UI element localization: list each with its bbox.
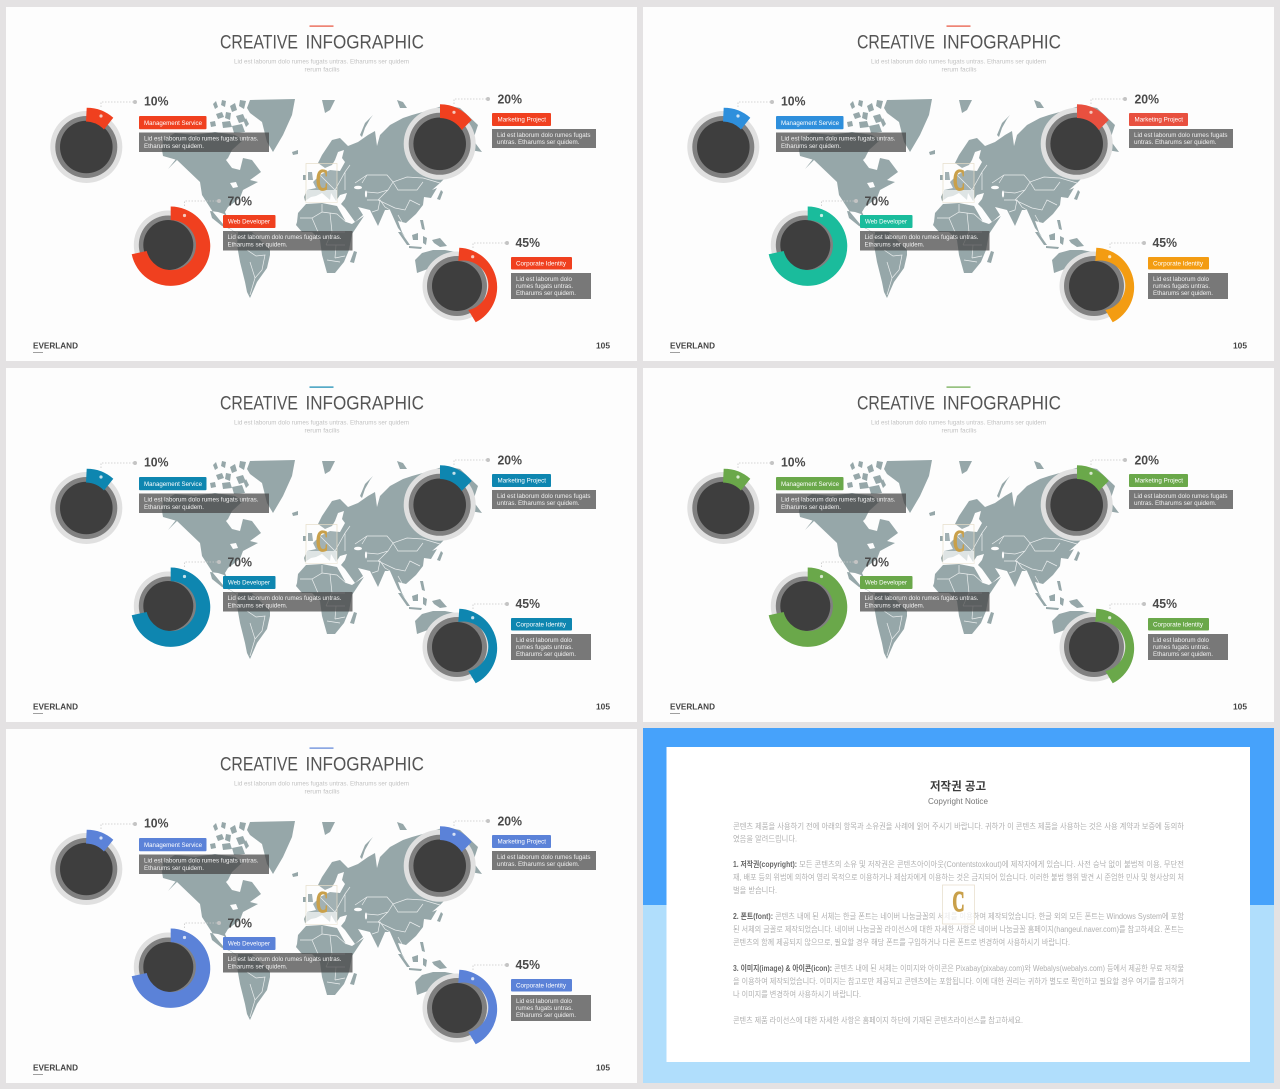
- notice subheading: Copyright Notice: [928, 797, 989, 806]
- label: Corporate Identity: Corporate Identity: [516, 621, 567, 628]
- title: CREATIVE: [220, 392, 298, 414]
- text box: Lid est laborum dolo rumes fugats untras.: [781, 496, 896, 504]
- watermark logo: [943, 162, 974, 202]
- subtitle: rerum facilis: [942, 428, 977, 434]
- text box: [139, 132, 269, 152]
- text box: Lid est laborum dolo rumes fugats: [497, 854, 590, 861]
- watermark logo: [306, 523, 337, 564]
- leader: 70%: [184, 560, 221, 567]
- value: 20%: 20%: [498, 92, 522, 106]
- page number: 105: [596, 340, 610, 350]
- label: Marketing Project: Marketing Project: [498, 478, 546, 485]
- donut: 10%: [50, 469, 122, 544]
- leader: 20%: [454, 97, 490, 104]
- value: 70%: 70%: [228, 916, 252, 930]
- notice section 1: 모든 콘텐츠의 소유 및 저작권은 콘텐츠아이아웃(Contentstoxkout)에 제작자에게 있습니다. 사전 승낙 없이 불법적 이용, 무단전: [799, 859, 1184, 869]
- title: INFOGRAPHIC: [942, 32, 1061, 54]
- subtitle: rerum facilis: [304, 788, 340, 796]
- title accent: [310, 26, 334, 27]
- leader: 45%: [473, 963, 509, 970]
- panel: periwinkle infographic slide: [6, 729, 637, 1083]
- donut: 45%: [422, 970, 497, 1044]
- text box: untras. Etharums ser quidem.: [497, 500, 580, 507]
- donut: 20%: [404, 465, 476, 541]
- value: 45%: 45%: [516, 958, 540, 972]
- subtitle: [871, 58, 1046, 74]
- leader: 20%: [454, 819, 490, 826]
- page number: 105: [596, 1062, 610, 1072]
- label: Corporate Identity: Corporate Identity: [516, 982, 567, 989]
- text box: [860, 231, 990, 250]
- text box: Lid est laborum dolo rumes fugats untras.: [864, 234, 979, 241]
- text box: untras. Etharums ser quidem.: [497, 139, 580, 146]
- donut: 10%: [50, 830, 122, 905]
- text box: [1129, 490, 1233, 509]
- leader: 70%: [822, 560, 858, 567]
- donut: 45%: [1060, 609, 1134, 683]
- label: Management Service: Management Service: [144, 120, 202, 127]
- footer brand: EVERLAND: [33, 340, 78, 350]
- notice section 1: 벌을 받습니다.: [733, 885, 777, 895]
- text box: Lid est laborum dolo rumes fugats untras.: [144, 136, 259, 142]
- donut: 20%: [404, 104, 476, 180]
- text box: Lid est laborum dolo rumes fugats untras.: [228, 234, 342, 241]
- footer brand: EVERLAND: [670, 340, 715, 350]
- text box: rumes fugats untras.: [516, 1005, 573, 1012]
- label: Marketing Project: [1129, 474, 1188, 487]
- world map: [162, 460, 490, 661]
- text box: [511, 273, 591, 299]
- title: CREATIVE: [220, 754, 298, 776]
- notice section 3: 콘텐츠 내에 된 서체는 이미지와 아이콘은 Pixabay(pixabay.com)와 Webalys(webalys.com) 등에서 제공한 무료 저작물: [834, 963, 1184, 973]
- panel: multicolour infographic slide: [643, 7, 1274, 361]
- notice section 3: 을 이용하여 제작되었습니다. 이미지는 참고로만 제공되고 콘텐츠에는 포함됩니다. 이에 대한 권리는 귀하가 별도로 확인하고 필요할 경우 여기를 참고하거: [733, 976, 1184, 986]
- value: 70%: 70%: [228, 194, 252, 208]
- subtitle: rerum facilis: [304, 428, 340, 434]
- leader: 10%: [101, 822, 137, 829]
- world map: [799, 460, 1127, 661]
- label: Marketing Project: [492, 474, 551, 487]
- text box: untras. Etharums ser quidem.: [1134, 500, 1217, 507]
- leader: 20%: [1091, 458, 1127, 465]
- label: Marketing Project: Marketing Project: [498, 117, 546, 124]
- value: 10%: 10%: [781, 94, 806, 108]
- label: Marketing Project: Marketing Project: [1134, 478, 1183, 485]
- notice section 2: 콘텐츠 내에 된 서체는 한글 폰트는 네이버 나눔글꼴의 서체를 이용하여 제작되었습니다. 한글 외의 모든 폰트는 Windows System에 포함: [775, 911, 1185, 921]
- label: Corporate Identity: Corporate Identity: [1153, 260, 1204, 267]
- panel: red infographic slide: [6, 7, 637, 361]
- value: 45%: 45%: [1152, 236, 1177, 250]
- label: Marketing Project: Marketing Project: [498, 839, 546, 846]
- title accent: [310, 386, 334, 388]
- notice section 2: [733, 911, 1185, 947]
- text box: [1148, 634, 1228, 660]
- label: Corporate Identity: [1148, 618, 1209, 630]
- text box: [139, 494, 269, 513]
- leader: 70%: [822, 199, 858, 206]
- panel: teal-blue infographic slide: [6, 368, 637, 722]
- text box: Lid est laborum dolo rumes fugats untras.: [864, 595, 979, 602]
- subtitle: Lid est laborum dolo rumes fugats untras. Etharums ser quidem: [871, 420, 1046, 426]
- donut: 20%: [1041, 104, 1113, 180]
- leader: 70%: [184, 921, 221, 928]
- text box: Lid est laborum dolo rumes fugats untras.: [144, 496, 259, 504]
- donut: 45%: [422, 609, 497, 683]
- world map: [799, 99, 1127, 300]
- label: Marketing Project: [492, 113, 551, 126]
- watermark logo: C: [953, 523, 965, 558]
- notice section 1: [733, 859, 1184, 895]
- text box: [223, 953, 352, 972]
- text box: [492, 129, 596, 148]
- text box: untras. Etharums ser quidem.: [1134, 139, 1217, 146]
- label: Management Service: [776, 116, 844, 129]
- leader: 20%: [1091, 97, 1127, 104]
- text box: Etharums ser quidem.: [144, 143, 204, 150]
- notice heading: 저작권 공고: [930, 779, 986, 793]
- donut: 70%: [769, 568, 847, 647]
- text box: Etharums ser quidem.: [144, 504, 204, 511]
- value: 70%: 70%: [228, 555, 252, 569]
- label: Web Developer: Web Developer: [228, 219, 271, 226]
- notice section 1: 1. 저작권(copyright):: [733, 859, 797, 869]
- leader: 10%: [738, 100, 774, 107]
- page number: 105: [1233, 340, 1247, 350]
- label: Corporate Identity: [1148, 257, 1209, 270]
- donut: 10%: [687, 108, 759, 183]
- label: Web Developer: [223, 937, 276, 950]
- leader: 10%: [101, 100, 137, 107]
- label: Management Service: Management Service: [781, 120, 839, 127]
- title accent: [310, 748, 334, 749]
- leader: 10%: [738, 461, 774, 468]
- donut: 70%: [132, 928, 210, 1008]
- label: Management Service: [139, 477, 206, 490]
- text box: Lid est laborum dolo: [1153, 276, 1209, 283]
- label: Web Developer: [860, 576, 912, 589]
- footer brand: EVERLAND: [33, 702, 78, 712]
- label: Web Developer: [860, 215, 912, 228]
- text box: Etharums ser quidem.: [864, 603, 925, 610]
- donut: 45%: [1060, 248, 1134, 322]
- label: Management Service: [776, 477, 844, 490]
- leader: 45%: [473, 602, 509, 609]
- notice section 2: 된 서체의 글꼴로 제작되었습니다. 네이버 나눔글꼴 라이선스에 대한 자세한 사항은 네이버 나눔글꼴 홈페이지(hangeul.naver.com)를 참고하세요. 폰트는: [733, 924, 1184, 934]
- text box: Etharums ser quidem.: [1153, 651, 1213, 658]
- text box: Lid est laborum dolo rumes fugats: [497, 493, 590, 500]
- title: CREATIVE: [857, 392, 935, 414]
- value: 10%: 10%: [144, 455, 168, 469]
- value: 20%: 20%: [498, 453, 522, 467]
- notice section 2: 콘텐츠의 함께 제공되지 않으므로, 필요할 경우 해당 폰트를 구입하거나 다른 폰트로 변경하여 사용하시기 바랍니다.: [733, 937, 1070, 947]
- label: Corporate Identity: Corporate Identity: [1153, 621, 1204, 628]
- text box: Lid est laborum dolo rumes fugats untras.: [781, 136, 896, 142]
- title: CREATIVE: [857, 32, 935, 54]
- label: Corporate Identity: Corporate Identity: [516, 260, 567, 267]
- subtitle: Lid est laborum dolo rumes fugats untras. Etharums ser quidem: [234, 780, 409, 788]
- text box: [511, 634, 591, 660]
- subtitle: Lid est laborum dolo rumes fugats untras. Etharums ser quidem: [234, 420, 409, 426]
- donut: 20%: [404, 826, 476, 902]
- text box: [1129, 129, 1233, 148]
- text box: [511, 995, 591, 1021]
- text box: rumes fugats untras.: [516, 644, 573, 651]
- value: 70%: 70%: [864, 555, 889, 569]
- subtitle: Lid est laborum dolo rumes fugats untras. Etharums ser quidem: [234, 58, 409, 66]
- subtitle: [234, 420, 409, 434]
- watermark logo: [942, 885, 974, 924]
- label: Corporate Identity: [511, 618, 572, 630]
- leader: 45%: [1110, 241, 1146, 248]
- leader: 45%: [473, 241, 509, 248]
- text box: rumes fugats untras.: [516, 283, 573, 290]
- label: Web Developer: [223, 215, 276, 228]
- watermark logo: C: [953, 162, 965, 197]
- notice closing: 콘텐츠 제품 라이선스에 대한 자세한 사항은 홈페이지 하단에 기재된 콘텐츠라이선스를 참고하세요.: [733, 1015, 1023, 1025]
- title: CREATIVE: [220, 32, 298, 54]
- value: 20%: 20%: [1134, 92, 1159, 106]
- label: Web Developer: Web Developer: [228, 580, 271, 587]
- watermark logo: C: [952, 886, 964, 918]
- value: 45%: 45%: [516, 597, 540, 611]
- donut: 70%: [132, 206, 210, 286]
- value: 45%: 45%: [1152, 597, 1177, 611]
- donut: 70%: [769, 206, 847, 286]
- value: 10%: 10%: [781, 455, 806, 469]
- label: Management Service: Management Service: [144, 842, 202, 849]
- text box: Lid est laborum dolo: [516, 637, 572, 644]
- text box: Etharums ser quidem.: [864, 242, 925, 249]
- watermark logo: C: [316, 162, 328, 197]
- watermark logo: [943, 523, 974, 564]
- footer brand: EVERLAND: [33, 1062, 78, 1072]
- notice section 3: [733, 963, 1184, 999]
- notice intro: [733, 821, 1185, 844]
- label: Web Developer: Web Developer: [228, 941, 271, 948]
- title: [220, 392, 424, 414]
- leader: 10%: [101, 461, 137, 468]
- text box: Lid est laborum dolo: [516, 998, 572, 1005]
- world map: [162, 821, 490, 1022]
- value: 20%: 20%: [1134, 453, 1159, 467]
- text box: [139, 854, 269, 874]
- watermark logo: C: [316, 523, 328, 558]
- title: INFOGRAPHIC: [306, 32, 424, 54]
- footer brand: EVERLAND: [670, 702, 715, 712]
- donut: 20%: [1041, 465, 1113, 541]
- text box: [223, 231, 352, 250]
- text box: Etharums ser quidem.: [516, 651, 576, 658]
- label: Management Service: Management Service: [781, 481, 839, 488]
- text box: Lid est laborum dolo rumes fugats: [1134, 132, 1228, 139]
- world map: [162, 99, 490, 300]
- text box: [776, 494, 906, 513]
- text box: [1148, 273, 1228, 299]
- label: Corporate Identity: [511, 979, 572, 992]
- text box: [776, 132, 906, 152]
- text box: Etharums ser quidem.: [144, 865, 204, 872]
- text box: Lid est laborum dolo: [1153, 637, 1209, 644]
- subtitle: rerum facilis: [304, 66, 340, 74]
- label: Web Developer: Web Developer: [865, 580, 908, 587]
- text box: rumes fugats untras.: [1153, 283, 1210, 290]
- value: 10%: 10%: [144, 94, 168, 108]
- text box: Etharums ser quidem.: [228, 603, 288, 610]
- notice intro: 였음을 알려드립니다.: [733, 834, 797, 844]
- donut: 10%: [50, 108, 122, 183]
- text box: Etharums ser quidem.: [1153, 290, 1213, 297]
- subtitle: [234, 780, 409, 796]
- text box: [860, 592, 990, 612]
- subtitle: Lid est laborum dolo rumes fugats untras. Etharums ser quidem: [871, 58, 1046, 66]
- value: 20%: 20%: [498, 814, 522, 828]
- title: [220, 754, 424, 776]
- leader: 45%: [1110, 602, 1146, 609]
- subtitle: [234, 58, 409, 74]
- value: 70%: 70%: [864, 194, 889, 208]
- text box: Lid est laborum dolo rumes fugats untras.: [228, 595, 342, 602]
- donut: 70%: [132, 568, 210, 647]
- leader: 20%: [454, 458, 490, 465]
- text box: Etharums ser quidem.: [781, 504, 841, 511]
- label: Management Service: Management Service: [144, 481, 202, 488]
- watermark logo: [306, 162, 337, 202]
- leader: 70%: [184, 199, 221, 206]
- text box: [223, 592, 352, 612]
- label: Management Service: [139, 838, 206, 851]
- label: Web Developer: [223, 576, 276, 589]
- value: 10%: 10%: [144, 816, 168, 830]
- notice section 3: 3. 이미지(image) & 아이콘(icon):: [733, 963, 832, 973]
- title accent: [946, 26, 970, 27]
- title: [857, 392, 1061, 414]
- panel: green infographic slide: [643, 368, 1274, 722]
- title: [857, 32, 1061, 54]
- title: INFOGRAPHIC: [306, 754, 424, 776]
- text box: Etharums ser quidem.: [228, 242, 288, 249]
- page number: 105: [596, 702, 610, 712]
- page number: 105: [1233, 702, 1247, 712]
- text box: Etharums ser quidem.: [228, 964, 288, 971]
- label: Marketing Project: [492, 835, 551, 848]
- donut: 10%: [687, 469, 759, 544]
- text box: Lid est laborum dolo rumes fugats: [497, 132, 590, 139]
- text box: [492, 490, 596, 509]
- text box: Lid est laborum dolo rumes fugats: [1134, 493, 1228, 500]
- notice intro: 콘텐츠 제품을 사용하기 전에 아래의 항목과 소유권을 사례에 읽어 주시기 바랍니다. 귀하가 이 콘텐츠 제품을 사용하는 것은 사용 계약과 보증에 동의하: [733, 821, 1185, 831]
- title: INFOGRAPHIC: [942, 392, 1061, 414]
- notice section 1: 재, 배포 등의 위법에 의하여 영리 목적으로 이용하거나 제삼자에게 이용하는 것은 금지되어 있습니다. 이러한 불법 행위 발견 시 준엄한 민사 및 형사상의 처: [733, 872, 1184, 882]
- watermark logo: C: [316, 884, 328, 919]
- donut: 45%: [422, 248, 497, 322]
- watermark logo: [306, 884, 337, 924]
- panel: copyright notice: [643, 728, 1274, 1083]
- title: INFOGRAPHIC: [306, 392, 424, 414]
- text box: untras. Etharums ser quidem.: [497, 861, 580, 868]
- label: Management Service: [139, 116, 206, 129]
- title accent: [946, 386, 970, 388]
- label: Marketing Project: [1129, 113, 1188, 126]
- text box: Lid est laborum dolo rumes fugats untras.: [228, 956, 342, 963]
- subtitle: rerum facilis: [942, 66, 977, 74]
- value: 45%: 45%: [516, 236, 540, 250]
- subtitle: [871, 420, 1046, 434]
- notice section 2: 2. 폰트(font):: [733, 912, 773, 921]
- text box: Lid est laborum dolo rumes fugats untras.: [144, 858, 259, 864]
- text box: rumes fugats untras.: [1153, 644, 1210, 651]
- notice section 3: 나 이미지를 변경하여 사용하시기 바랍니다.: [733, 989, 861, 999]
- text box: Etharums ser quidem.: [781, 143, 841, 150]
- text box: Etharums ser quidem.: [516, 1012, 576, 1019]
- title: [220, 32, 424, 54]
- label: Corporate Identity: [511, 257, 572, 270]
- label: Marketing Project: Marketing Project: [1134, 117, 1183, 124]
- text box: Etharums ser quidem.: [516, 290, 576, 297]
- label: Web Developer: Web Developer: [865, 219, 908, 226]
- text box: [492, 851, 596, 870]
- text box: Lid est laborum dolo: [516, 276, 572, 283]
